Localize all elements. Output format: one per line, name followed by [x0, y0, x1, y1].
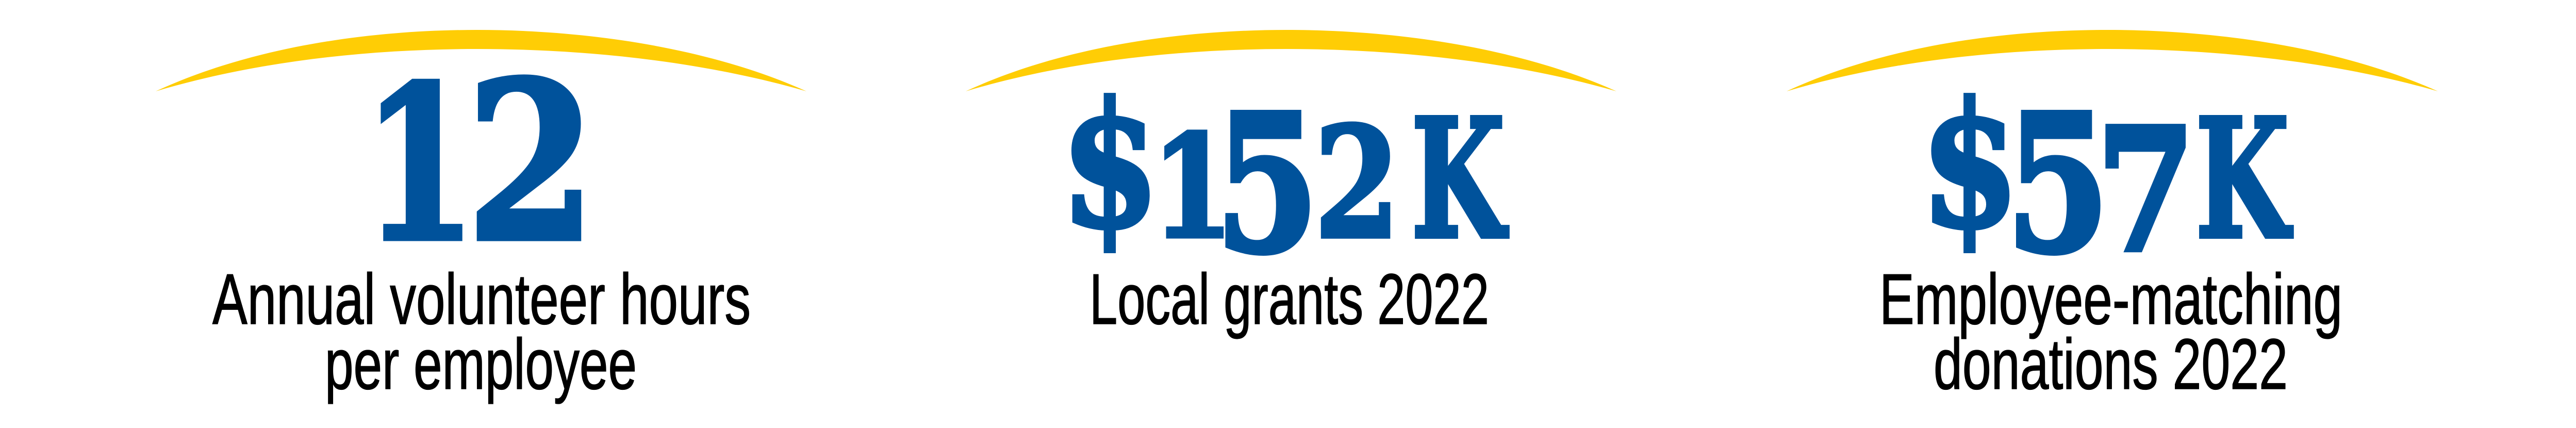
arc: yellow swoosh	[156, 30, 806, 91]
panel: employee-matching donations	[1787, 30, 2438, 404]
caption: employee-matching donations 2022	[1879, 259, 2342, 404]
stat: $152K: K	[1411, 83, 1509, 276]
arc: yellow swoosh	[1787, 30, 2438, 91]
caption: employee-matching donations 2022: donations 2022	[1934, 324, 2288, 404]
panel: annual volunteer hours	[156, 30, 806, 404]
stat: $152K: $	[1061, 65, 1160, 267]
stat: $152K: 2	[1314, 94, 1400, 273]
stat: $57K: K	[2195, 83, 2293, 276]
arc: yellow swoosh	[966, 30, 1616, 91]
stat: $57K: 7	[2096, 91, 2195, 290]
caption: annual volunteer hours per employee: Annual volunteer hours	[212, 259, 751, 339]
stat: $152K: 1	[1151, 104, 1234, 270]
caption: employee-matching donations 2022: Employee-matching	[1879, 259, 2342, 339]
stat: $57K: 5	[2006, 73, 2110, 296]
stat: 12: 1	[362, 39, 477, 289]
caption: annual volunteer hours per employee	[212, 259, 751, 404]
stat: $152K	[1061, 65, 1509, 296]
stat: 12	[362, 34, 596, 290]
caption: local grants 2022: Local grants 2022	[1089, 259, 1489, 339]
stat: 12: 2	[466, 34, 596, 290]
stat: $57K: $	[1920, 65, 2020, 267]
stat: $152K: 5	[1215, 73, 1319, 296]
panel: local grants	[966, 30, 1616, 339]
stat: $57K	[1920, 65, 2293, 296]
caption: annual volunteer hours per employee: per employee	[325, 324, 637, 404]
